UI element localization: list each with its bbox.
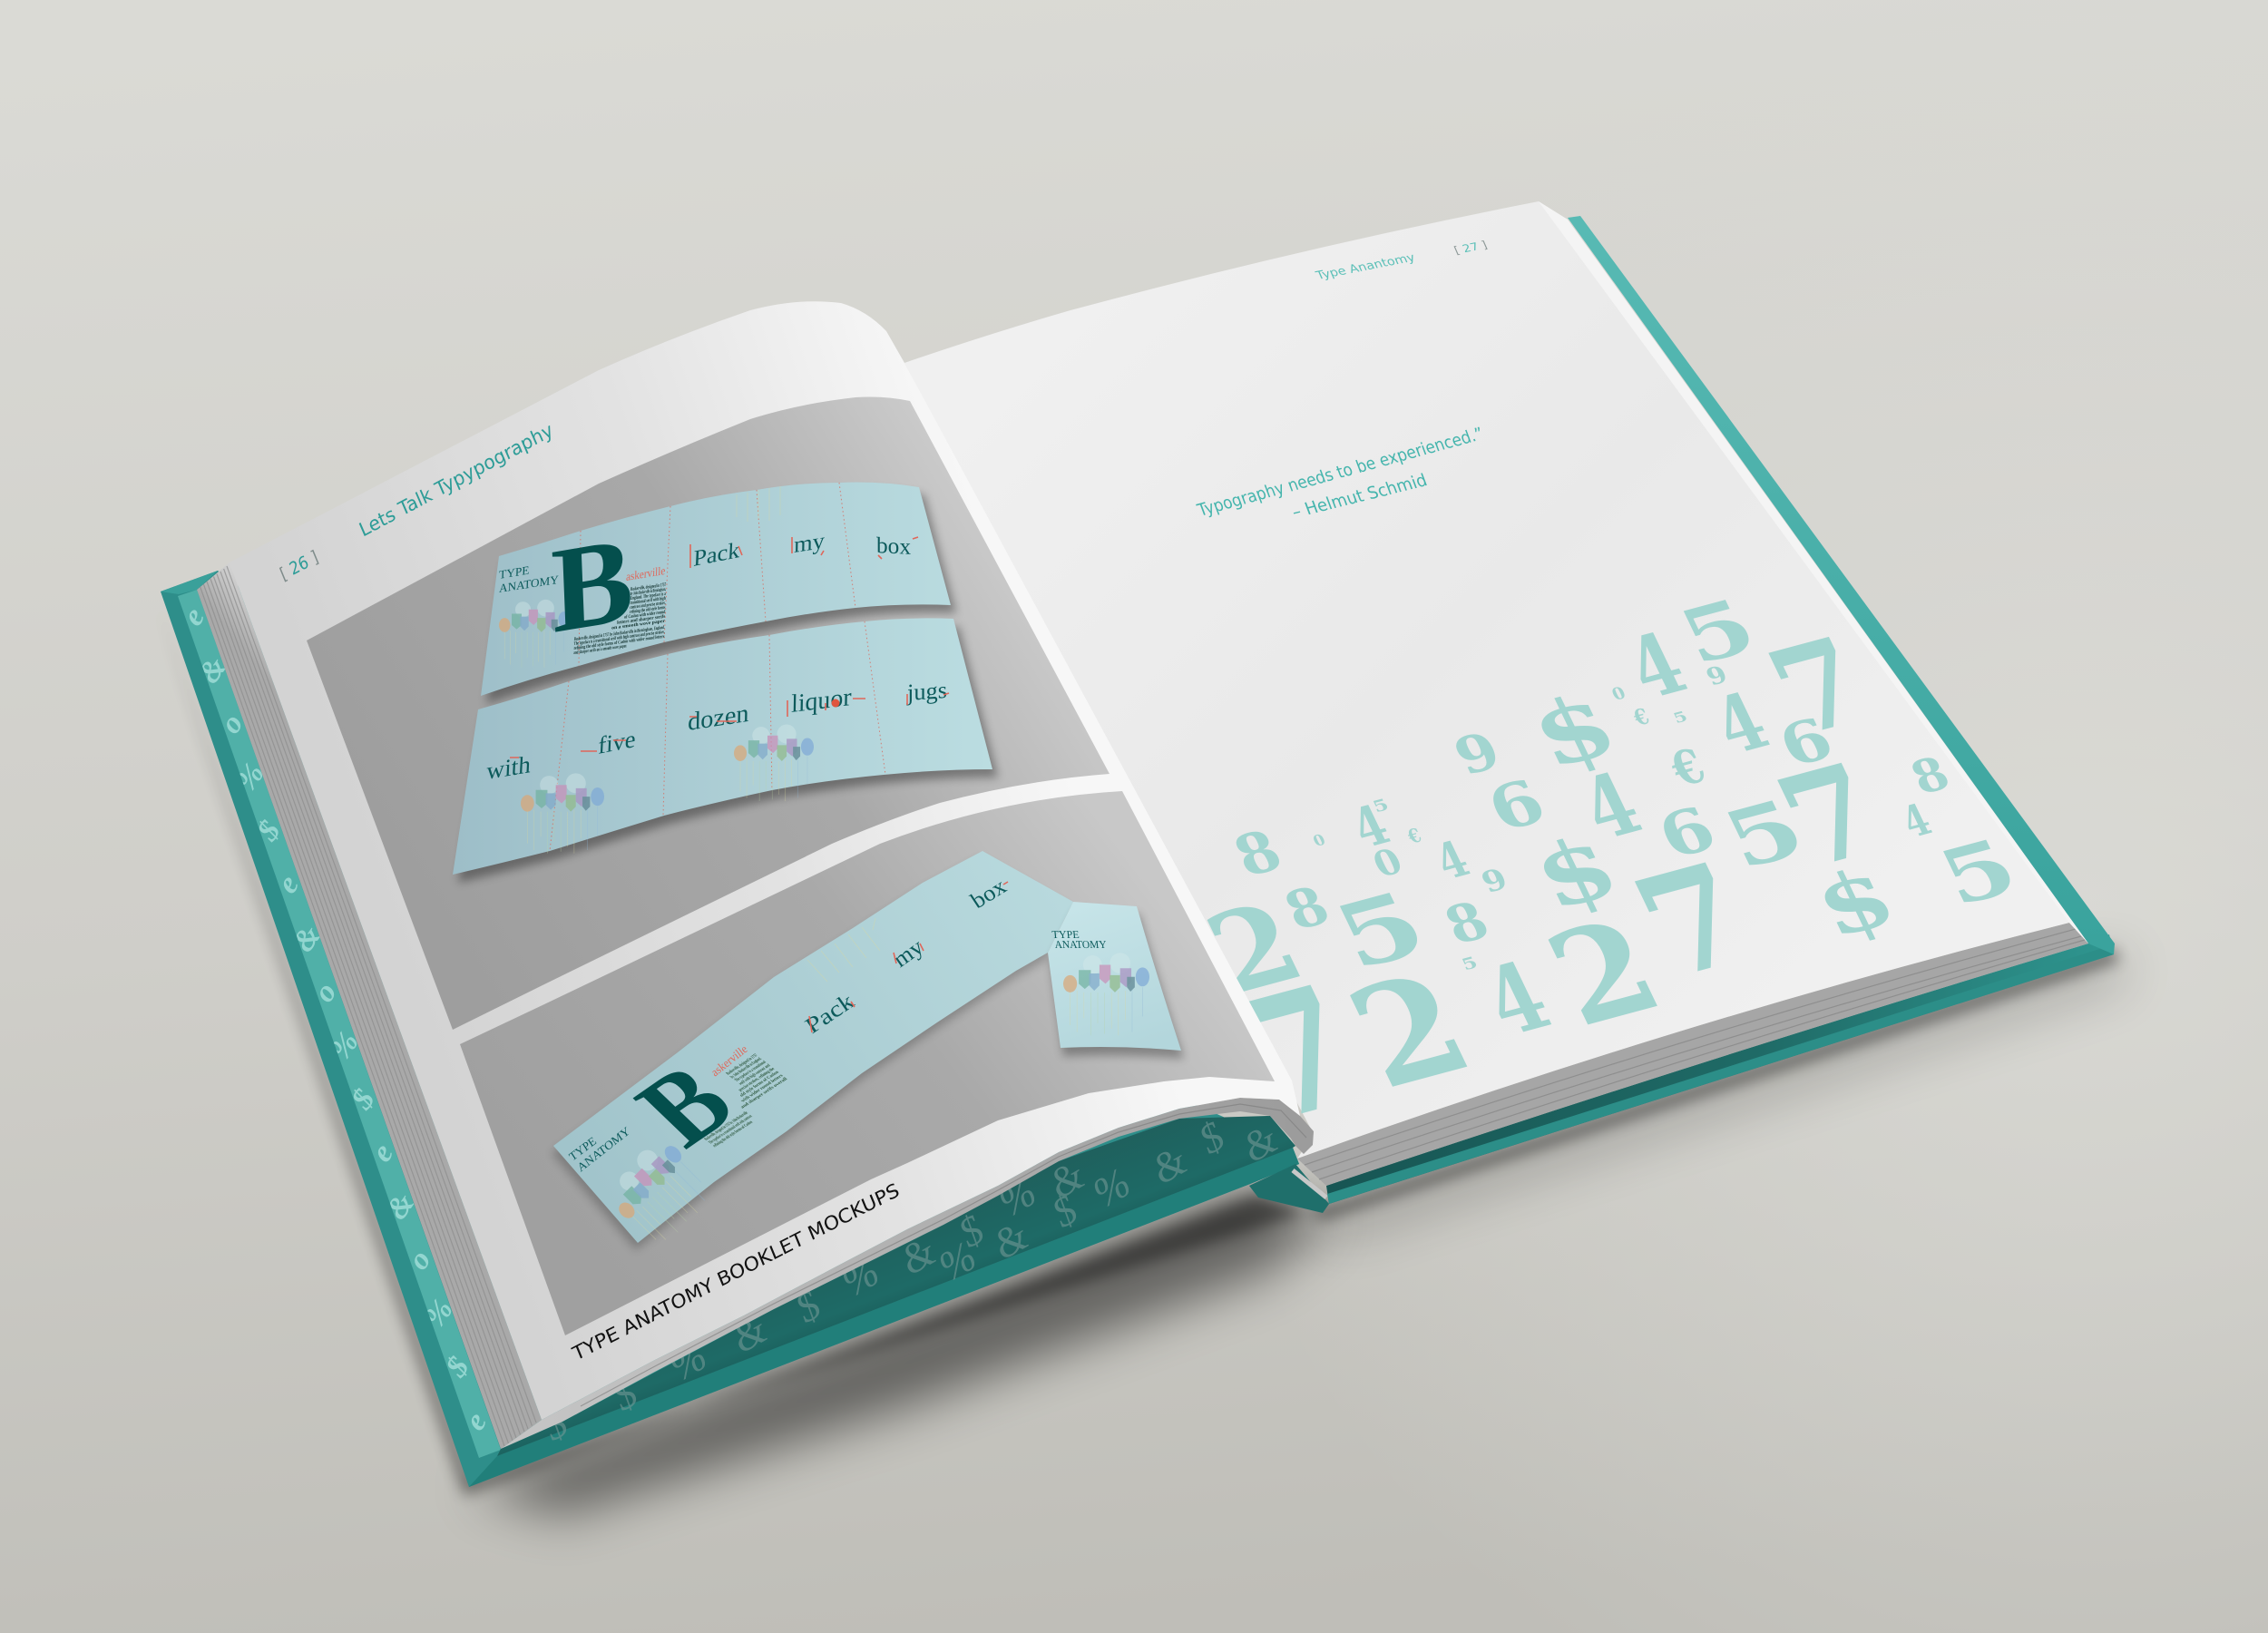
falling numerals pattern: 2 xyxy=(1188,879,1322,1019)
falling numerals pattern: 9 xyxy=(1476,862,1513,900)
falling numerals pattern: $ xyxy=(1514,673,1633,787)
quote attribution: – Helmut Schmid xyxy=(1289,471,1430,523)
falling numerals pattern: 5 xyxy=(1319,872,1442,989)
falling numerals pattern: 0 xyxy=(1366,841,1409,885)
balloons illustration on card xyxy=(1063,953,1149,1035)
big letter B on strip: B xyxy=(612,1043,758,1168)
coral anatomy marks xyxy=(510,693,949,758)
word: Pack on strip: Pack xyxy=(801,989,859,1039)
left page block edge xyxy=(197,562,542,1449)
endpaper glyph pattern: o xyxy=(214,708,250,739)
falling numerals pattern: 6 xyxy=(1476,766,1557,846)
falling numerals pattern: 5 xyxy=(1370,795,1392,816)
dark endpaper glyph pattern: & xyxy=(1234,1115,1286,1171)
body copy block on strip: The typeface is a transitional xyxy=(734,1060,767,1083)
word: my on strip: my xyxy=(889,934,929,973)
body copy block on strip: by John Baskerville in England. xyxy=(729,1056,764,1080)
endpaper glyph pattern: % xyxy=(417,1293,460,1334)
endpaper glyph pattern: % xyxy=(229,757,271,797)
falling numerals pattern: 7 xyxy=(1199,950,1394,1159)
cover lower band xyxy=(469,1148,1299,1487)
word: with: with xyxy=(486,750,532,785)
dark endpaper glyph pattern: $ xyxy=(604,1369,645,1420)
left page curved stack xyxy=(501,1098,1314,1449)
dark endpaper glyph pattern xyxy=(534,1112,1286,1450)
body copy block: of Caslon with wider round xyxy=(624,610,665,621)
falling numerals pattern: 7 xyxy=(1756,736,1906,896)
strip heading: ANATOMY: ANATOMY xyxy=(574,1123,632,1174)
balloons illustration right xyxy=(734,724,814,801)
falling numerals pattern: 4 xyxy=(1342,793,1399,860)
falling numerals pattern: 8 xyxy=(1435,890,1498,956)
falling numerals pattern: 4 xyxy=(1427,830,1478,891)
falling numerals pattern: 0 xyxy=(1608,683,1629,705)
body copy block: The typeface is a transitional serif with high contrast and precise strokes, xyxy=(574,630,665,647)
dark endpaper glyph pattern: $ xyxy=(1191,1112,1232,1163)
falling numerals pattern: 8 xyxy=(1224,818,1292,890)
strip heading: TYPE: TYPE xyxy=(566,1134,599,1163)
word: Pack: Pack xyxy=(693,538,741,572)
caption: TYPE ANATOMY BOOKLET MOCKUPS: TYPE ANATOMY BOOKLET MOCKUPS xyxy=(569,1179,903,1365)
running head: Type Anantomy: Type Anantomy xyxy=(1314,251,1418,283)
body copy block on strip: and sharper serifs overall xyxy=(739,1077,789,1110)
falling numerals pattern: 9 xyxy=(1701,660,1732,691)
right cover outer strip xyxy=(1568,216,2115,954)
body copy block: and sharper serifs on a smooth wove paper. xyxy=(573,643,628,656)
right page fore-edge margin xyxy=(1539,201,2088,944)
word: dozen: dozen xyxy=(688,699,749,737)
body copy block on strip: refining the old style forms of Caslon xyxy=(712,1120,754,1149)
dark endpaper glyph pattern: & xyxy=(984,1212,1036,1268)
endpaper glyph pattern xyxy=(176,601,494,1437)
word: box on strip: box xyxy=(966,874,1012,914)
coral anatomy marks xyxy=(690,537,918,568)
falling numerals pattern: € xyxy=(1628,704,1654,731)
dark endpaper glyph pattern: & xyxy=(723,1305,775,1362)
body copy block: Baskerville, designed in 1757 xyxy=(631,582,666,592)
falling numerals pattern: € xyxy=(1403,824,1425,848)
booklet 2: lower panels xyxy=(453,618,998,883)
falling numerals pattern: 2 xyxy=(1326,943,1494,1120)
body copy block: refining the old style forms of Caslon with wider round letters xyxy=(573,634,665,651)
falling numerals pattern: 4 xyxy=(1612,613,1700,718)
left page (26) xyxy=(230,301,1300,1420)
left cover board xyxy=(161,571,1299,1487)
page number 26: [ 26 ] xyxy=(278,548,321,585)
card heading: TYPE: TYPE xyxy=(1051,928,1080,941)
falling numerals pattern: $ xyxy=(1517,816,1634,929)
card heading: ANATOMY: ANATOMY xyxy=(1054,938,1108,951)
partial letter B: B xyxy=(1121,900,1209,1012)
falling numerals pattern: 4 xyxy=(1567,755,1656,859)
body copy block on strip: Baskerville, designed in 1757 xyxy=(725,1053,759,1076)
booklet heading: TYPE: TYPE xyxy=(499,563,530,582)
body copy block on strip xyxy=(668,1053,803,1149)
body copy block: Baskerville, designed in 1757 by John Baskerville in Birmingham, England. xyxy=(574,625,665,642)
body copy block on strip: old style forms of Caslon xyxy=(738,1071,780,1098)
falling numerals pattern: 4 xyxy=(1468,942,1566,1058)
body copy block on strip: with wider round letters xyxy=(740,1073,785,1103)
dark endpaper glyph pattern: & xyxy=(892,1227,943,1284)
body copy block on strip: The typeface is a transitional serif with contrast xyxy=(708,1114,754,1145)
dark endpaper glyph pattern: % xyxy=(661,1332,715,1390)
endpaper glyph pattern: e xyxy=(270,869,306,900)
falling numerals pattern: 9 xyxy=(1445,721,1510,787)
dark endpaper glyph pattern: & xyxy=(1143,1137,1195,1193)
body copy block: contrast and precise strokes, xyxy=(630,601,666,611)
falling numerals pattern: 8 xyxy=(1902,747,1958,806)
running head: Lets Talk Typypography: Lets Talk Typypography xyxy=(356,419,556,542)
book shadow on surface xyxy=(156,599,2127,1515)
body copy block on strip: precise strokes, refining the xyxy=(738,1067,777,1092)
falling numerals pattern: 6 xyxy=(1768,705,1843,780)
dark endpaper glyph pattern: $ xyxy=(534,1399,575,1450)
upper photo panel xyxy=(307,397,1110,1030)
endpaper glyph pattern: & xyxy=(192,650,234,689)
falling numerals pattern: 5 xyxy=(1709,782,1820,887)
booklet 1: type anatomy panels: by John Baskerville in Birmingham, xyxy=(631,587,666,597)
body copy block on strip: Baskerville, designed in 1757 by John Baskerville xyxy=(703,1110,749,1141)
quote: Typography needs to be experienced.” xyxy=(1194,424,1486,521)
lower photo panel xyxy=(460,791,1275,1335)
falling numerals pattern xyxy=(1188,582,2031,1159)
endpaper glyph pattern: & xyxy=(287,919,328,958)
dark endpaper glyph pattern: $ xyxy=(951,1206,992,1257)
spine tuck xyxy=(1249,1164,1329,1213)
word: liquor: liquor xyxy=(791,683,852,719)
dark endpaper glyph pattern: % xyxy=(931,1232,984,1290)
right page (27) xyxy=(904,201,2088,1159)
falling numerals pattern: 6 xyxy=(1647,793,1727,873)
falling numerals pattern: 0 xyxy=(1310,831,1329,850)
booklet 3: long folded strip xyxy=(552,851,1073,1252)
falling numerals pattern: 5 xyxy=(1926,823,2031,924)
dark endpaper glyph pattern: $ xyxy=(787,1281,828,1332)
endpaper glyph pattern: % xyxy=(323,1025,366,1066)
endpaper glyph pattern: $ xyxy=(345,1083,382,1116)
body copy block on strip: serif with high contrast and xyxy=(738,1063,772,1086)
word: five: five xyxy=(598,725,636,759)
word: box: box xyxy=(876,533,912,560)
word: my: my xyxy=(794,529,826,558)
falling numerals pattern: € xyxy=(1660,738,1715,797)
right cover lower lip xyxy=(1327,944,2114,1204)
body copy block: on a smooth wove paper xyxy=(611,619,666,631)
body copy block: England. The typeface is a xyxy=(631,592,666,601)
balloons illustration xyxy=(600,1132,719,1252)
endpaper glyph pattern: o xyxy=(402,1244,438,1276)
booklet 1: type anatomy panels xyxy=(481,483,956,704)
endpaper glyph pattern: e xyxy=(365,1138,400,1169)
falling numerals pattern: 7 xyxy=(1749,612,1890,763)
falling numerals pattern: $ xyxy=(1800,849,1911,956)
balloons illustration left xyxy=(521,773,604,854)
dark endpaper glyph pattern: % xyxy=(834,1247,887,1305)
left endpaper strip with script glyphs xyxy=(161,571,501,1458)
body copy block: letters and sharper serifs xyxy=(617,614,665,626)
dark endpaper glyph pattern: & xyxy=(1041,1151,1092,1208)
falling numerals pattern: 4 xyxy=(1894,795,1939,848)
endpaper glyph pattern: $ xyxy=(250,815,288,847)
askerville label on strip: askerville xyxy=(709,1041,750,1079)
endpaper glyph pattern: o xyxy=(308,976,344,1008)
body copy block: refining the old style forms xyxy=(630,605,665,615)
body copy block xyxy=(573,582,667,656)
body copy block: transitional serif with high xyxy=(630,596,666,606)
falling numerals pattern: 2 xyxy=(1525,890,1683,1055)
page number 27: [ 27 ] xyxy=(1452,239,1489,257)
dark endpaper glyph pattern: $ xyxy=(1044,1186,1085,1237)
falling numerals pattern: 7 xyxy=(1611,833,1776,1010)
endpaper glyph pattern: e xyxy=(458,1406,494,1437)
endpaper glyph pattern: e xyxy=(176,601,211,632)
falling numerals pattern: 4 xyxy=(1700,675,1782,772)
falling numerals pattern: 5 xyxy=(1459,953,1481,973)
askerville label: askerville xyxy=(626,563,666,583)
word: jugs: jugs xyxy=(906,677,947,706)
falling numerals pattern: 5 xyxy=(1666,582,1770,681)
dark endpaper glyph pattern: % xyxy=(1085,1159,1139,1217)
right cover board xyxy=(1326,216,2115,1204)
balloons illustration xyxy=(499,600,570,668)
right page block edge xyxy=(1297,923,2088,1186)
falling numerals pattern: 8 xyxy=(1276,875,1339,943)
falling numerals pattern: 5 xyxy=(1671,709,1690,727)
big letter B: B xyxy=(549,512,636,660)
booklet heading: ANATOMY: ANATOMY xyxy=(499,572,560,595)
booklet 3: folded card xyxy=(1047,902,1187,1063)
dark endpaper glyph pattern: % xyxy=(991,1168,1044,1226)
dark inside endpaper under curled pages xyxy=(497,1112,1295,1456)
endpaper glyph pattern: $ xyxy=(439,1351,476,1384)
endpaper glyph pattern: & xyxy=(380,1187,422,1226)
